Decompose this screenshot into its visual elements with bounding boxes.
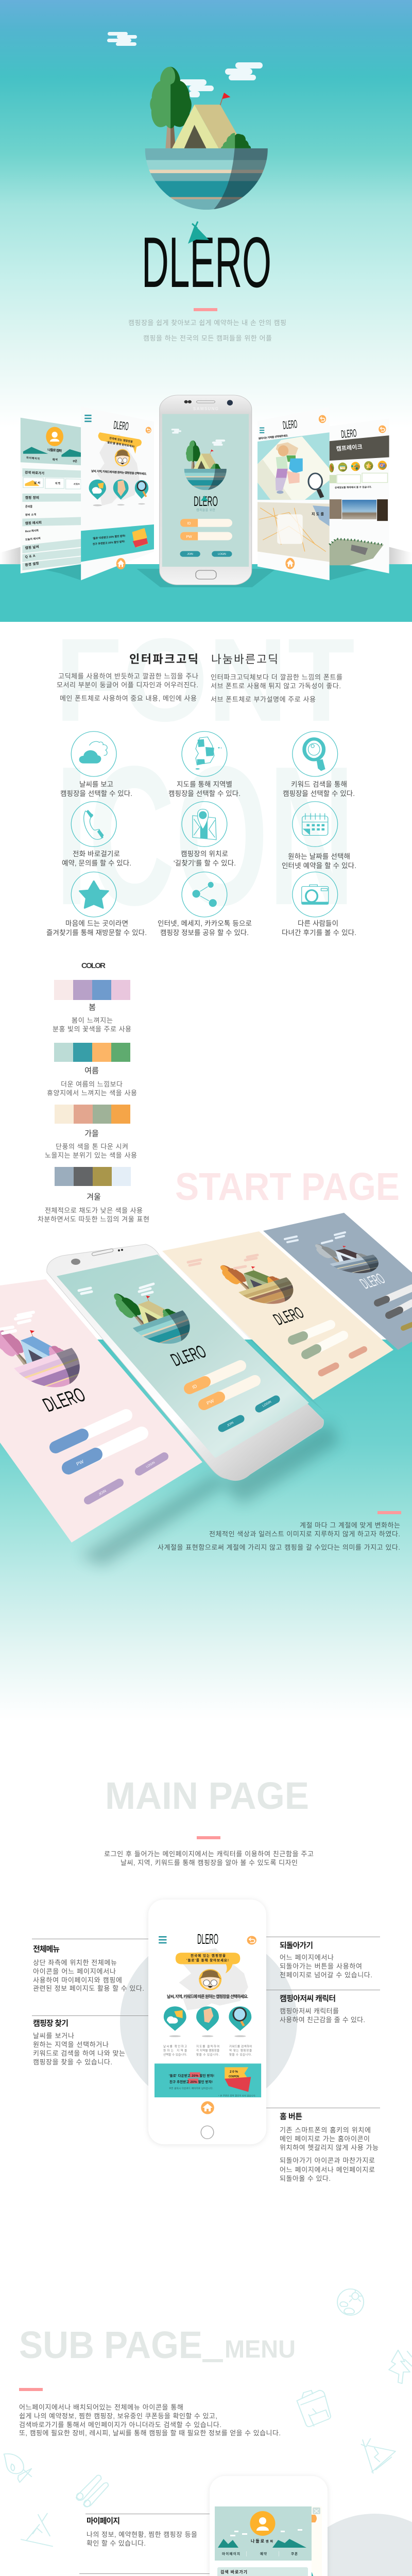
screen shapes: menu	[215, 2506, 322, 2576]
heading: primary font: 인터파크고딕	[129, 653, 198, 666]
text: start page description: 사계절을 표현함으로써 계절에 가리지 않고 캠핑을 갈 수있다는 의미를 가지고 있다.	[158, 1544, 400, 1551]
text: main screen: 날씨, 지역, 키워드에 따른 원하는 캠핑장을 선택하세요.	[167, 1994, 248, 1999]
text: mini screen labels: 날씨	[34, 481, 40, 485]
text: mini screen labels: 지도를	[312, 512, 324, 516]
divider: pink bar	[197, 1836, 220, 1839]
callout: home button	[266, 2108, 380, 2182]
text: spring	[53, 1003, 131, 1033]
icon set	[71, 732, 338, 917]
text: secondary font description	[211, 673, 342, 703]
text: summer: 휴양지에서 느껴지는 색을 사용	[47, 1089, 137, 1097]
swatches: summer	[54, 1043, 130, 1062]
shadow: beige screen edge	[162, 1251, 324, 1412]
text: winter: 전체적으로 채도가 낮은 색을 사용	[45, 1207, 143, 1214]
callout: find campsite: 원하는 지역을 선택하거나	[33, 2041, 109, 2048]
text: mini screen labels: 환경 설정	[25, 561, 39, 567]
text: main screen: 찾을 수 있습니다.	[229, 2053, 252, 2057]
text: secondary font description: 서브 폰트체로 부가설명에 주로 사용	[211, 696, 316, 703]
callout: find campsite	[32, 2015, 148, 2066]
text: autumn: 단풍의 색을 톤 다운 시켜	[56, 1143, 128, 1150]
background circle	[120, 1933, 297, 2110]
heading: SUB PAGE_MENU: SUB PAGE	[19, 2324, 202, 2366]
teal gradient backdrop	[0, 1340, 412, 1721]
text: mini screen labels: 캠프레이크	[336, 443, 363, 452]
text: mini screen labels: ID	[187, 522, 191, 526]
panel: detail screen	[329, 418, 389, 573]
text: mini screen labels: 오늘의 레시피	[25, 536, 41, 541]
text: main screen: 지도를 클릭하여	[196, 2044, 219, 2048]
icon: keyword search	[304, 739, 325, 771]
text: secondary font description: 서브 폰트로 사용해 튀지 않고 가독성이 좋다.	[211, 682, 341, 690]
text: start page description: 전체적인 색상과 일러스트 이미지로 지루하지 않게 하고자 하였다.	[209, 1530, 400, 1538]
text: primary font description	[57, 672, 198, 702]
text: mini screen labels: LOGIN	[218, 553, 226, 556]
text: main screen: 날씨를 확인하고	[163, 2044, 187, 2048]
swatches: autumn	[55, 1105, 130, 1124]
callout: back button: 되돌아가는 버튼을 사용하여	[280, 1962, 362, 1970]
text: icon captions	[46, 781, 356, 937]
divider: pink bar	[194, 308, 217, 311]
screen: spring	[0, 1279, 202, 1543]
text: mini screen labels: 친구 추천받고 20% 할인 받자!	[93, 539, 125, 546]
text: main screen: 찾을 수 있습니다.	[196, 2053, 219, 2057]
text: summer: 더운 여름의 느낌보다	[61, 1080, 123, 1088]
teal band	[0, 564, 412, 622]
panel: map screen	[258, 407, 330, 580]
screen: spring: JOIN	[98, 1489, 107, 1497]
callout: search shortcut	[79, 2573, 210, 2576]
text: mini screen labels: '들로' 다운받고 20% 할인 받자!	[93, 534, 126, 540]
text: mini screen labels: 마이페이지	[26, 456, 40, 461]
text: spring: 봄	[89, 1003, 96, 1012]
text: mini screen labels: 캠핑 장비	[25, 495, 39, 500]
divider: pink bar	[377, 1511, 401, 1514]
text: autumn: 가을	[84, 1129, 99, 1138]
icon: clouds	[107, 32, 263, 97]
icon: weather	[79, 741, 107, 764]
text: autumn: 노을지는 분위기 있는 색을 사용	[45, 1151, 137, 1159]
text: main screen: 쿠폰 클릭시 다운로드 페이지로 넘어갑니다.	[169, 2087, 213, 2090]
callout: full menu: 사용하여 마이페이지와 캠핑에	[33, 1976, 122, 1984]
callout: full menu	[32, 1939, 148, 1992]
callout: my page: 마이페이지	[87, 2517, 120, 2526]
text: mini screen labels: 쿠폰	[73, 460, 77, 463]
text: main screen	[163, 1931, 256, 2097]
text: icon captions: 캠핑장을 선택할 수 있다.	[168, 790, 241, 798]
phone frame	[148, 1900, 266, 2144]
panel: icons	[46, 724, 356, 946]
text: main screen: 키워드를 검색하여	[229, 2044, 252, 2048]
text: menu screen	[220, 2538, 303, 2576]
text: start page description	[158, 1521, 400, 1551]
text: winter	[38, 1193, 149, 1223]
text: mini screen labels: Best 레시피	[25, 529, 39, 533]
text: mini screen labels: Q & A	[25, 554, 36, 559]
text: menu screen: 예약	[260, 2551, 267, 2556]
panel: sub page menu	[0, 2289, 412, 2576]
callout: back button: 전페이지로 넘어갈 수 있습니다.	[280, 1971, 372, 1979]
text: icon captions: 지도를 통해 지역별	[177, 781, 232, 788]
text: mini screen labels: 지역	[55, 482, 60, 485]
text: primary font description: 메인 폰트체로 사용하여 중요 내용, 메인에 사용	[60, 694, 197, 702]
text: main page description: 날씨, 지역, 키워드를 통해 캠핑장을 알아 볼 수 있도록 디자인	[121, 1859, 298, 1867]
phone: angled mockup: ID	[192, 1383, 198, 1390]
text: main page description	[104, 1850, 314, 1867]
screen: spring: PW	[76, 1459, 84, 1467]
callout: back button: 어느 페이지에서나	[280, 1954, 334, 1961]
text: icon captions: 다녀간 후기를 볼 수 있다.	[282, 929, 356, 937]
icon: share	[192, 882, 217, 907]
text: secondary font description: 인터파크고딕체보다 더 깔끔한 느낌의 폰트를	[211, 673, 342, 681]
panel: font	[55, 614, 355, 746]
text: icon captions: 날씨를 보고	[79, 781, 113, 788]
screen: autumn: DLERO	[270, 1303, 307, 1329]
text: mini screen labels: 원하시는 지역을 선택해주세요.	[258, 434, 288, 440]
text: main screen: 딱 맞는 캠핑장을	[229, 2048, 252, 2053]
text: menu description: 어느페이지에서나 배치되어있는 전체메뉴 아이콘을 통해	[19, 2403, 183, 2411]
text: tagline: 캠핑장을 쉽게 찾아보고 쉽게 예약하는 내 손 안의 캠핑	[128, 319, 286, 327]
text: tagline	[128, 319, 286, 342]
icon: telephone	[84, 810, 104, 839]
watermark: FONT: FONT	[55, 614, 355, 746]
text: main screen: '들로' 다운받고 20% 할인 받자!	[169, 2073, 214, 2078]
text: icon captions: 캠핑장 정보를 공유 할 수 있다.	[160, 929, 249, 937]
text: icon captions: 즐겨찾기를 통해 재방문할 수 있다.	[46, 929, 147, 937]
callout: find campsite: 키워드로 검색을 하여 나와 맞는	[33, 2049, 125, 2057]
text: main screen: 친구 추천받고 20% 할인 받자!	[169, 2079, 213, 2084]
callout: home button: 어느 페이지에서나 메인페이지로	[280, 2166, 375, 2174]
text: mini screen labels: JOIN	[187, 553, 193, 556]
callout: home button: 위치하여 헷갈리지 않게 사용 가능	[280, 2144, 379, 2151]
callout: character	[266, 1990, 380, 2024]
text: mini screen labels: 나들로 캠퍼	[47, 447, 62, 453]
phone: angled mockup: LOGIN	[262, 1400, 272, 1408]
text: mini screen labels: 키워드	[74, 482, 80, 485]
text: mini screen labels: SAMSUNG	[193, 406, 218, 411]
screen shapes: main	[154, 1936, 261, 2139]
text: menu screen: 검색 바로가기	[220, 2569, 247, 2574]
text: spring: 분홍 빛의 꽃색을 주로 사용	[53, 1025, 131, 1033]
text: main screen: 각 지역별 캠핑장을	[196, 2048, 219, 2053]
illustration: floating island with tent	[142, 66, 271, 210]
heading: COLOR: COLOR	[81, 961, 106, 970]
text: main screen: 선택할 수 있습니다.	[163, 2053, 187, 2057]
callout: find campsite: 날씨를 보거나	[33, 2032, 74, 2040]
text: main screen: * 본 쿠폰은 중복 할인이 되지 않습니다.	[218, 2094, 256, 2097]
text: start page description: 계절 마다 그 계절에 맞게 변화하는	[300, 1521, 400, 1529]
text: menu description	[19, 2403, 281, 2437]
callout: find campsite: 캠핑장을 찾을 수 있습니다.	[33, 2058, 112, 2066]
text: menu description: 검색바로가기를 통해서 메인페이지가 아니더라도 검색할 수 있습니다.	[19, 2421, 221, 2429]
text: menu description: 또, 캠핑에 필요한 장비, 레시피, 날씨를 통해 캠핑을 할 때 필요한 정보를 얻을 수 있습니다.	[19, 2429, 281, 2437]
heading: SUB PAGE_MENU: MENU	[225, 2336, 296, 2363]
text: summer	[47, 1066, 137, 1097]
logo: DLERO	[142, 222, 271, 302]
callout: home button: 홈 버튼	[280, 2112, 302, 2121]
logo: DLERO: DLERO	[142, 223, 271, 302]
panel: app screens showcase	[0, 395, 412, 622]
text: menu screen: 나들로	[251, 2538, 265, 2544]
phone: angled mockup: PW	[206, 1398, 215, 1406]
text: summer: 여름	[84, 1066, 99, 1075]
callout: my page	[85, 2514, 210, 2547]
panel: main screen	[81, 406, 154, 580]
text: icon captions: 캠핑장의 위치로	[181, 850, 228, 858]
callout: back button	[266, 1937, 380, 1979]
text: winter: 겨울	[87, 1193, 101, 1201]
text: winter: 차분하면서도 따듯한 느낌의 겨울 표현	[38, 1215, 149, 1223]
text: icon captions: 다른 사람들이	[298, 920, 338, 927]
callout: home button: 되돌아가기 아이콘과 마찬가지로	[280, 2157, 375, 2164]
text: mini screen labels: 준비물	[25, 505, 32, 509]
divider: pink bar	[19, 2388, 43, 2391]
text: main screen: 20%	[230, 2070, 238, 2074]
text: icon captions: 예약, 문의를 할 수 있다.	[62, 859, 131, 867]
panel: colour palettes	[38, 961, 149, 1223]
text: main screen: 원하는 지역을	[163, 2048, 187, 2053]
screens group	[0, 395, 412, 587]
phone: Samsung mockup	[160, 395, 252, 585]
text: primary font description: 고딕체를 사용하여 반듯하고 깔끔한 느낌을 주나	[58, 672, 198, 680]
text: menu screen: 마이페이지	[222, 2551, 240, 2556]
callout: home button: 메인 페이지로 가는 홈아이콘이	[280, 2135, 370, 2143]
text: icon captions: 캠핑장을 선택할 수 있다.	[60, 790, 132, 798]
text: icon captions: 원하는 날짜를 선택해	[288, 853, 350, 860]
heading: START PAGE: START PAGE	[175, 1165, 400, 1208]
text: mini screen labels: 예약	[53, 458, 58, 462]
decorative camping icons	[0, 2289, 412, 2576]
callout: home button: 기존 스마트폰의 홈키의 위치에	[280, 2126, 371, 2134]
text: mini screen labels: 캠핑 날씨	[25, 544, 39, 550]
callout: full menu: 상단 좌측에 위치한 전체메뉴	[33, 1959, 117, 1967]
callout: find campsite: 캠핑장 찾기	[33, 2019, 68, 2028]
callout: full menu: 아이콘을 어느 페이지에서나	[33, 1968, 116, 1975]
icon: star	[80, 881, 108, 908]
text: icon captions: 마음에 드는 곳이라면	[65, 920, 128, 927]
text: mini screen labels: DLERO	[282, 417, 298, 432]
heading: secondary font: 나눔바른고딕	[211, 653, 278, 666]
text: icon captions: 인터넷 예약을 할 수 있다.	[282, 862, 356, 870]
callout: my page: 나의 정보, 예약현황, 찜한 캠핑장 등을	[87, 2531, 197, 2538]
text: spring: 봄이 느껴지는	[72, 1016, 113, 1024]
text: primary font description: 모서리 부분이 둥글어 어플 디자인과 어우러진다.	[57, 681, 198, 689]
phone: angled mockup: DLERO	[167, 1342, 210, 1370]
panel: main page	[32, 1774, 380, 2182]
phone: angled mockup	[47, 1244, 323, 1481]
screen: autumn	[162, 1231, 393, 1400]
screen: spring: LOGIN	[146, 1461, 156, 1469]
text: icon captions: 키워드 검색을 통해	[291, 781, 347, 788]
swatches: winter	[55, 1167, 131, 1186]
icon: calendar	[302, 814, 328, 835]
icon: map of Korea	[196, 737, 222, 770]
shadow: cards and phone	[80, 1422, 340, 1566]
swatches: spring	[54, 980, 130, 1000]
callout: full menu: 전체메뉴	[33, 1945, 60, 1954]
text: mini screen labels: 검색 바로가기	[25, 470, 44, 476]
text: mini screen labels: 날씨, 지역, 키워드에 따른 원하는 캠핑장을 선택하세요.	[91, 469, 147, 476]
text: icon captions: '길찾기'를 할 수 있다.	[174, 859, 236, 867]
text: main screen: COUPON	[229, 2075, 239, 2078]
text: icon captions: 전화 바로걸기로	[73, 850, 120, 858]
text: mini screen labels: PW	[186, 535, 192, 539]
text: main page description: 로그인 후 들어가는 메인페이지에서는 캐릭터를 이용하여 친근함을 주고	[104, 1850, 314, 1858]
panel: menu screen	[21, 418, 81, 573]
text: mini screen labels	[25, 406, 372, 567]
text: mini screen labels: DLERO	[113, 418, 129, 433]
text: mini screen labels: 캠핑 레시피	[25, 520, 42, 526]
text: icon captions: 인터넷, 메세지, 카카오톡 등으로	[158, 920, 252, 927]
text: autumn	[45, 1129, 137, 1159]
callout: my page: 확인 할 수 있습니다.	[87, 2539, 146, 2547]
callout: character: 캠핑아저씨 캐릭터	[280, 1994, 336, 2003]
background circle	[286, 2514, 412, 2576]
icon: camera	[302, 885, 329, 904]
text: menu description: 쉽게 나의 예약정보, 찜한 캠핑장, 보유중인 쿠폰등을 확인할 수 있고,	[19, 2412, 217, 2420]
text: main screen: DLERO	[197, 1931, 218, 1947]
text: mini screen labels: DLERO	[340, 427, 357, 440]
callout: home button: 되돌아올 수 있다.	[280, 2175, 331, 2182]
text: mini screen labels: 캠퍼들을 위한	[196, 508, 215, 512]
text: mini screen labels: 전국에 있는 캠핑장을	[109, 436, 133, 444]
screen: winter	[263, 1213, 412, 1350]
callout: full menu: 관련된 정보 페이지도 활용 할 수 있다.	[33, 1985, 144, 1992]
callout: character: 캠핑아저씨 캐릭터를	[280, 2007, 339, 2015]
text: mini screen labels: 장비 소개	[25, 513, 36, 517]
text: main screen: 전국에 있는 캠핑장을	[191, 1953, 226, 1958]
text: menu screen: 캠퍼	[266, 2539, 273, 2544]
text: menu screen: 쿠폰	[291, 2552, 298, 2556]
text: mini screen labels: 상세정보를 확대해서 볼 수 있습니다.	[335, 485, 372, 489]
text: main screen: '들로'를 통해 찾아보세요!	[186, 1958, 229, 1962]
panel: hero	[0, 0, 412, 428]
icon: directions map	[193, 809, 216, 840]
phone frame	[210, 2476, 328, 2576]
text: mini screen labels: DLERO	[194, 494, 218, 509]
text: icon captions: 캠핑장을 선택할 수 있다.	[283, 790, 355, 798]
panel: start page	[0, 1165, 412, 1721]
screen: spring: DLERO	[39, 1383, 89, 1416]
callout: character: 사용하여 친근감을 줄 수 있다.	[280, 2016, 365, 2024]
text: mini screen labels: '들로'를 통해 찾아보세요!	[107, 440, 135, 449]
heading: MAIN PAGE: MAIN PAGE	[105, 1774, 309, 1817]
callout: back button: 되돌아가기	[280, 1941, 313, 1950]
text: tagline: 캠핑을 하는 전국의 모든 캠퍼들을 위한 어플	[143, 334, 272, 342]
phone: angled mockup: JOIN	[227, 1421, 234, 1428]
